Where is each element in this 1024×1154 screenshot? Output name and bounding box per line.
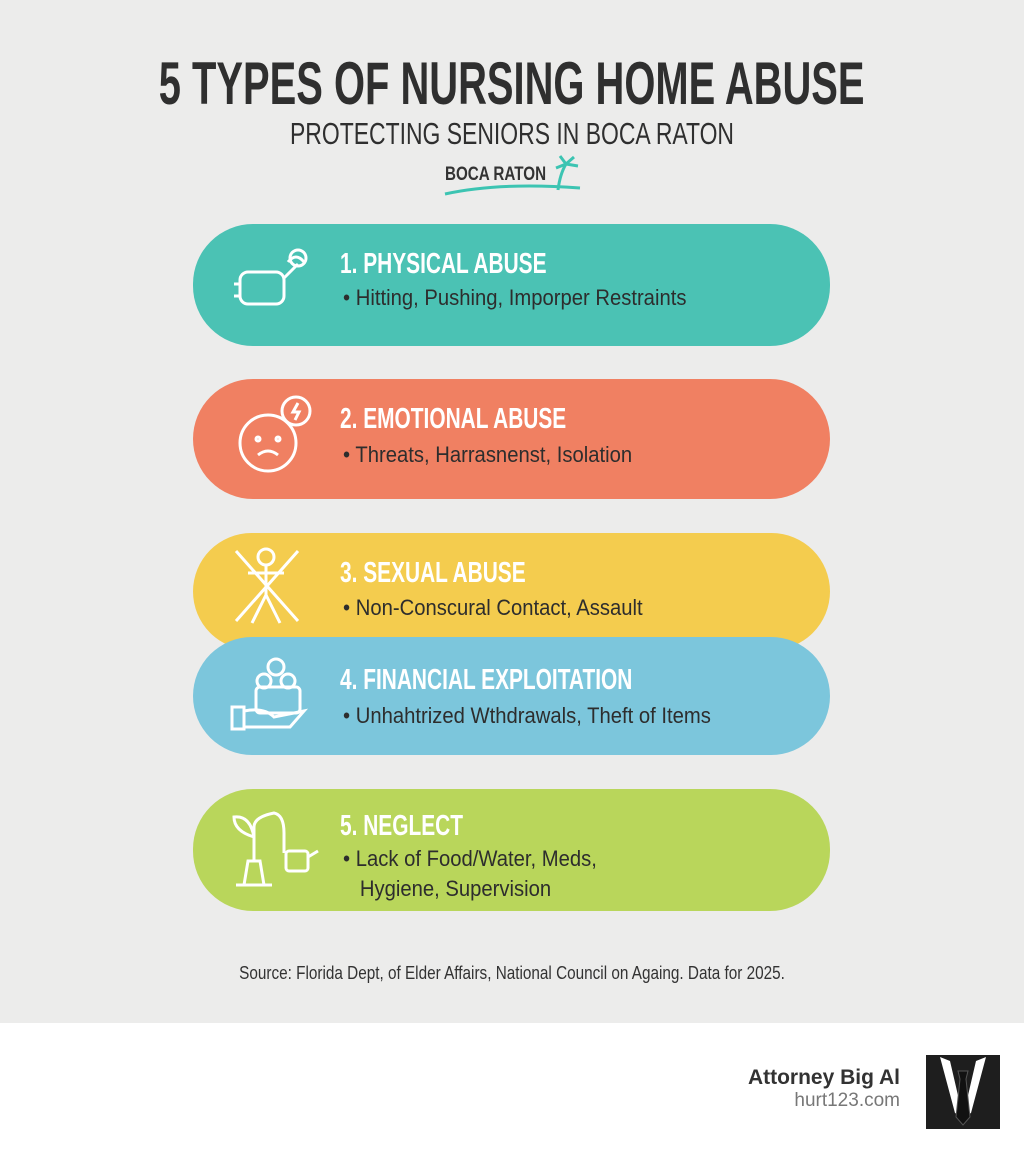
- logo: Boca Raton: [444, 155, 580, 196]
- icon: plant and watering can: [232, 812, 319, 886]
- footer: [0, 1023, 1024, 1154]
- panel: sexual abuse: • Non-Conscural Contact, Assault: [343, 595, 643, 620]
- icon: suit logo: [926, 1055, 1000, 1129]
- icon: crossed figure: [235, 548, 299, 624]
- logo: Boca Raton: BOCA RATON: [445, 164, 546, 185]
- icon: sad face: [238, 396, 312, 472]
- panel: financial exploitation: [193, 637, 830, 755]
- panel: neglect: [193, 789, 830, 911]
- panel: sexual abuse: 3. SEXUAL ABUSE: [340, 557, 526, 589]
- panel: physical abuse: [193, 224, 830, 346]
- branding text: [748, 1066, 900, 1111]
- panel: neglect: 5. NEGLECT: [340, 810, 463, 842]
- panel: emotional abuse: • Threats, Harrasnenst, Isolation: [343, 442, 632, 467]
- subtitle: PROTECTING SENIORS IN BOCA RATON: [290, 116, 734, 151]
- panel: sexual abuse: [193, 533, 830, 650]
- panel: emotional abuse: 2. EMOTIONAL ABUSE: [340, 403, 566, 435]
- icon: fist: [234, 248, 308, 306]
- source note: Source: Florida Dept, of Elder Affairs, National Council on Againg. Data for 2025.: [239, 963, 785, 983]
- title: 5 TYPES OF NURSING HOME ABUSE: [159, 50, 865, 117]
- panel: financial exploitation: 4. FINANCIAL EXPLOITATION: [340, 664, 632, 696]
- panel: physical abuse: • Hitting, Pushing, Imporper Restraints: [343, 285, 686, 310]
- branding text: hurt123.com: [794, 1090, 900, 1111]
- panel: neglect: Hygiene, Supervision: [360, 876, 551, 901]
- branding text: Attorney Big Al: [748, 1066, 900, 1089]
- panel: financial exploitation: • Unhahtrized Wthdrawals, Theft of Items: [343, 703, 711, 728]
- panel: physical abuse: 1. PHYSICAL ABUSE: [340, 248, 547, 280]
- panel: emotional abuse: [193, 379, 830, 499]
- panel: neglect: • Lack of Food/Water, Meds,: [343, 846, 597, 871]
- icon: hand with wallet: [230, 658, 308, 730]
